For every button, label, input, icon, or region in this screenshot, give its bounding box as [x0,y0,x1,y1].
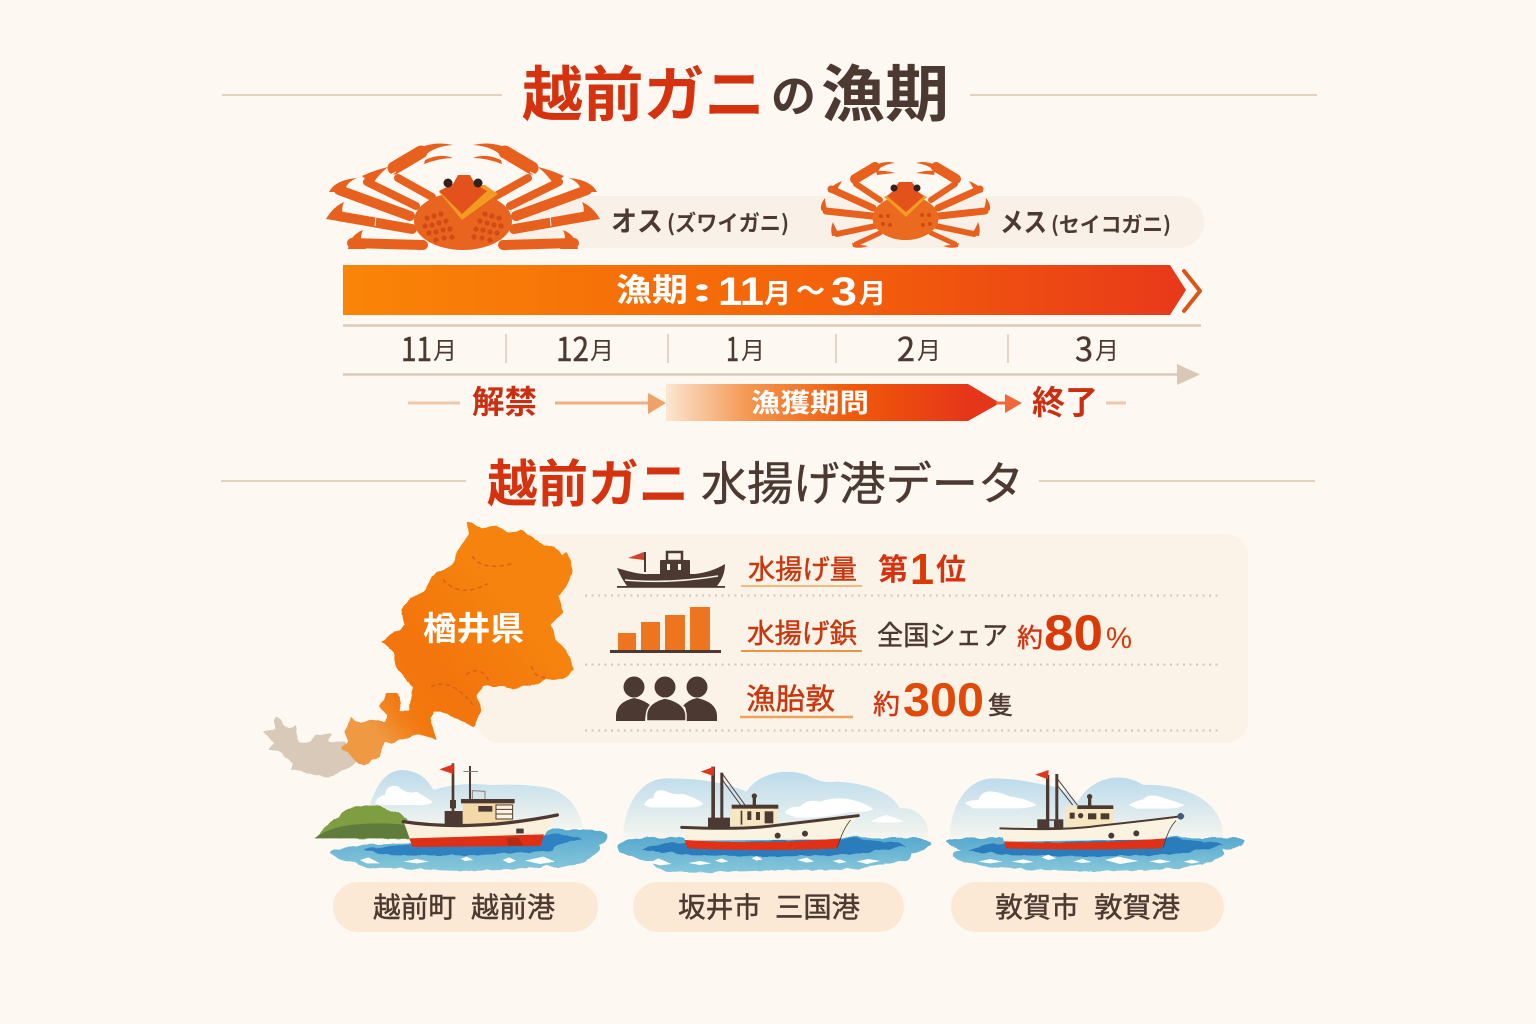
port: Tsuruga: 敦賀港 [1094,886,1180,926]
label: female crab: メス [1000,201,1047,240]
month labels: 3 [1075,323,1093,371]
illustration: Tsuruga boat [945,770,1245,872]
arrow bar: fishing season: 漁期 [616,265,688,311]
row: landing value: % [1106,622,1132,655]
month labels: 月 [1095,331,1119,366]
mountain marks [432,557,547,705]
panel: landing stats [478,534,1248,743]
heading: landing port data: 水揚げ港データ [701,448,1024,514]
label: female crab [1000,201,1171,240]
month labels [401,323,1119,371]
month labels: 11 [401,323,432,371]
label: female crab: (セイコガニ) [1051,209,1171,239]
icon: people [616,676,717,721]
month timeline [343,323,1201,385]
row: landing value: 約 [1017,618,1043,655]
row: fishing boats: 約 [873,683,900,722]
title: fishing season: の [771,60,816,125]
month labels: 月 [741,331,765,366]
row: landing volume: 位 [936,545,966,589]
month labels: 月 [590,331,614,366]
row: landing value [610,605,1132,661]
neighbouring land [263,717,358,778]
port label [633,882,904,932]
panel: crab label pill [500,196,1204,248]
row: fishing boats: 300 [903,673,984,726]
port: Echizen [315,763,607,932]
label: male crab: (ズワイガニ) [667,206,789,238]
row: landing volume: 1 [910,545,934,594]
season phases row: 漁獲期問 [751,383,869,420]
prefecture shape [343,523,573,765]
arrow bar: fishing season: 11 [718,270,764,314]
row: fishing boats: 漁胎敦 [746,676,835,718]
season phases row: 解禁 [472,377,537,423]
port: Tsuruga [945,770,1245,932]
month labels: 2 [897,323,915,371]
port: Mikuni: 三国港 [775,886,860,926]
port: Echizen: 越前町 [373,886,456,926]
row: landing volume: 水揚げ量 [748,548,857,587]
prefecture name: 楢井県 [423,602,524,650]
icon: male crab [326,144,600,250]
dotted row dividers [585,596,1218,730]
month labels: 月 [917,331,941,366]
month labels: 月 [433,331,457,366]
arrow bar: fishing season: 3 [831,270,857,314]
title: fishing season: 漁期 [821,44,949,134]
arrow bar: fishing season: : [692,266,712,310]
icon: female crab [821,162,990,248]
port label [333,882,598,932]
arrow bar: fishing season: 月 [859,272,886,311]
heading: landing port data: 越前ガニ [487,443,689,517]
row: fishing boats: 隻 [988,686,1013,722]
port: Mikuni: 坂井市 [678,886,761,926]
title: fishing season [222,44,1317,134]
heading: landing port data [221,443,1315,517]
season phases row: 終了 [1032,376,1098,424]
port: Echizen: 越前港 [471,886,555,926]
month labels: 1 [726,323,739,371]
row: landing volume [617,545,966,594]
row: landing value: 80 [1044,605,1103,661]
month labels: 12 [556,323,589,371]
season phases row [408,376,1126,424]
illustration: Echizen boat [315,763,607,871]
title: fishing season: 越前ガニ [522,47,765,134]
arrow bar: fishing season: 月 [764,272,791,311]
icon: bar chart [610,607,721,653]
illustration: Mikuni boat [618,767,931,872]
row: landing value: 水揚げ鋲 [747,612,857,651]
arrow bar: fishing season: ～ [796,268,825,310]
icon: boat [617,552,725,588]
map: Fukui prefecture [263,523,573,778]
port: Mikuni [618,767,931,932]
row: fishing boats [616,673,1013,726]
port label [951,882,1224,932]
port: Tsuruga: 敦賀市 [995,886,1079,926]
label: male crab [611,200,789,240]
row: landing value: 全国シェア [877,614,1008,653]
label: male crab: オス [611,200,663,240]
row: landing volume: 第 [878,545,908,589]
arrow bar: fishing season [343,265,1200,315]
